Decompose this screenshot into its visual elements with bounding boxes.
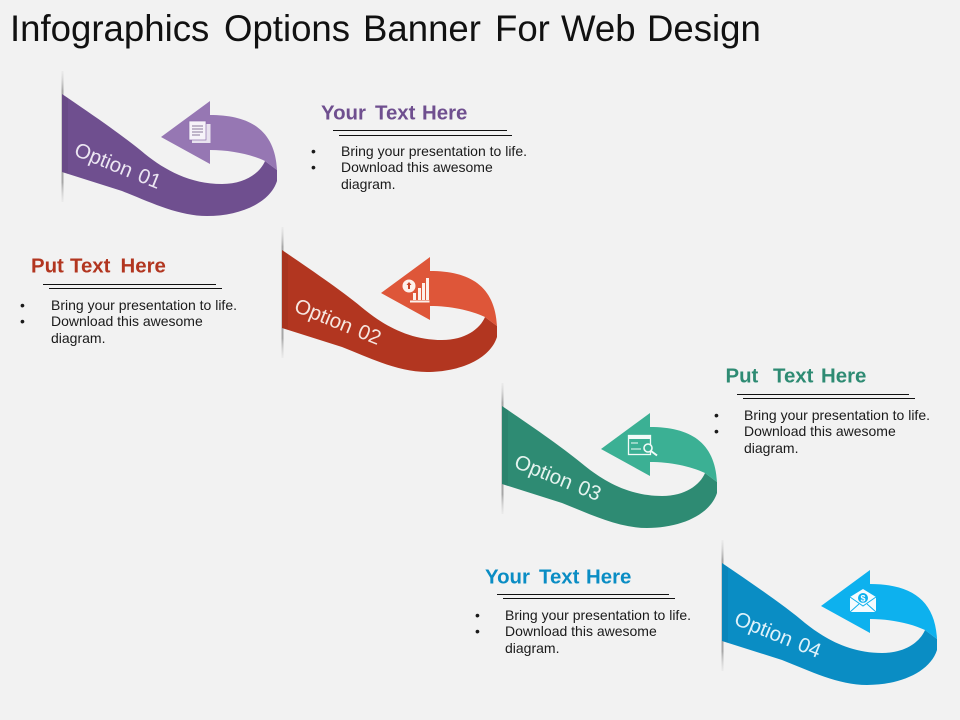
- text block: your text here 1: Here: [422, 102, 467, 124]
- label: option 01: Option 01: [71, 138, 164, 194]
- text block: your text here 1: diagram.: [341, 176, 395, 192]
- text block: put text here 1: Bring your presentation to life.: [51, 297, 237, 313]
- text block: your text here 2: Your: [485, 566, 530, 588]
- text block: put text here 1: diagram.: [51, 330, 105, 346]
- text block: put text here 2: Bring your presentation to life.: [744, 407, 930, 423]
- title: Banner: [363, 8, 481, 49]
- icon: browser search: [628, 435, 657, 456]
- text block: put text here 2: Text: [773, 366, 814, 388]
- arrow ribbon: option 01: [62, 71, 277, 216]
- arrow ribbon: option 04: [722, 540, 937, 685]
- text block: put text here 2: Put: [726, 366, 759, 388]
- text block: your text here 2: Here: [586, 566, 631, 588]
- label: option 02: Option 02: [291, 294, 384, 350]
- text block: your text here 1: •: [311, 143, 316, 159]
- text block: your text here 1: •: [311, 159, 316, 175]
- text block: put text here 2: Here: [821, 366, 866, 388]
- icon: chart and gear: [402, 278, 430, 302]
- text block: your text here 2: diagram.: [505, 640, 559, 656]
- title: Infographics: [10, 8, 209, 49]
- title: Web: [561, 8, 636, 49]
- label: option 03: Option 03: [511, 450, 604, 506]
- icon: document: [189, 121, 210, 143]
- text block: put text here 1: Text: [70, 256, 111, 278]
- arrow ribbon: option 02: [282, 227, 497, 372]
- icon: envelope with dollar: $: [860, 594, 866, 604]
- text block: your text here 2: •: [475, 607, 480, 623]
- text block: put text here 1: Put: [31, 256, 64, 278]
- text block: your text here 2: [475, 566, 691, 656]
- text block: your text here 2: Text: [539, 566, 580, 588]
- text block: your text here 1: Download this awesome: [341, 159, 493, 175]
- title: Design: [647, 8, 761, 49]
- text block: your text here 1: Your: [321, 102, 366, 124]
- text block: put text here 2: Download this awesome: [744, 423, 896, 439]
- title: For: [495, 8, 550, 49]
- text block: your text here 2: Download this awesome: [505, 623, 657, 639]
- text block: put text here 2: •: [714, 407, 719, 423]
- text block: put text here 1: •: [20, 297, 25, 313]
- text block: your text here 1: Text: [375, 102, 416, 124]
- text block: put text here 2: [714, 366, 930, 456]
- text block: your text here 2: Bring your presentation to life.: [505, 607, 691, 623]
- text block: put text here 1: [20, 256, 237, 346]
- text block: your text here 2: •: [475, 623, 480, 639]
- text block: put text here 1: Here: [120, 256, 166, 278]
- text block: put text here 2: •: [714, 423, 719, 439]
- arrow ribbon: option 03: [502, 383, 717, 528]
- title: Options: [224, 8, 350, 49]
- label: option 04: Option 04: [731, 607, 824, 663]
- text block: put text here 1: Download this awesome: [51, 313, 203, 329]
- text block: your text here 1: [311, 102, 527, 192]
- text block: put text here 2: diagram.: [744, 440, 798, 456]
- icon: envelope with dollar: [850, 589, 876, 612]
- text block: your text here 1: Bring your presentation to life.: [341, 143, 527, 159]
- text block: put text here 1: •: [20, 313, 25, 329]
